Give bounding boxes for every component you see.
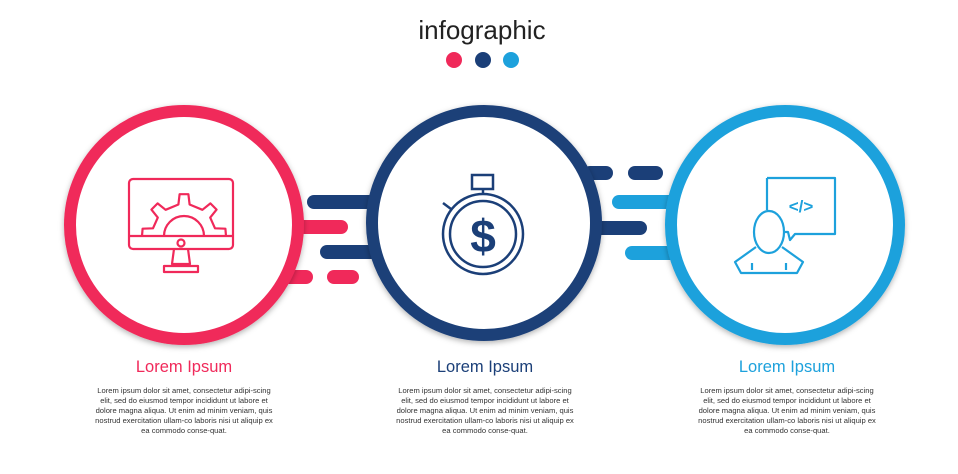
heading 2: Lorem Ipsum [437,358,533,376]
dots [446,52,519,68]
title: infographic [418,15,546,45]
icon: developer [735,178,835,273]
icon: stopwatch dollar: $ [470,210,496,262]
text 2: Lorem ipsum dolor sit amet, consectetur adipi-scing elit, sed do eiusmod tempor incididunt ut labore et dolore magna aliqua. Ut enim ad minim veniam, quis nostrud exercitation ullam-co laboris nisi ut aliquip ex ea commodo conse-quat. [396,386,574,435]
circle 1 [70,111,298,339]
circle 3 [671,111,899,339]
circle 2 [372,111,596,335]
heading 3: Lorem Ipsum [739,358,835,376]
icon: monitor gear [129,179,233,272]
text 3: Lorem ipsum dolor sit amet, consectetur adipi-scing elit, sed do eiusmod tempor incididunt ut labore et dolore magna aliqua. Ut enim ad minim veniam, quis nostrud exercitation ullam-co laboris nisi ut aliquip ex ea commodo conse-quat. [698,386,876,435]
heading 1: Lorem Ipsum [136,358,232,376]
text 1: Lorem ipsum dolor sit amet, consectetur adipi-scing elit, sed do eiusmod tempor incididunt ut labore et dolore magna aliqua. Ut enim ad minim veniam, quis nostrud exercitation ullam-co laboris nisi ut aliquip ex ea commodo conse-quat. [95,386,273,435]
icon: developer: </> [789,197,813,216]
icon: stopwatch dollar [443,175,523,274]
connectors [287,173,690,277]
